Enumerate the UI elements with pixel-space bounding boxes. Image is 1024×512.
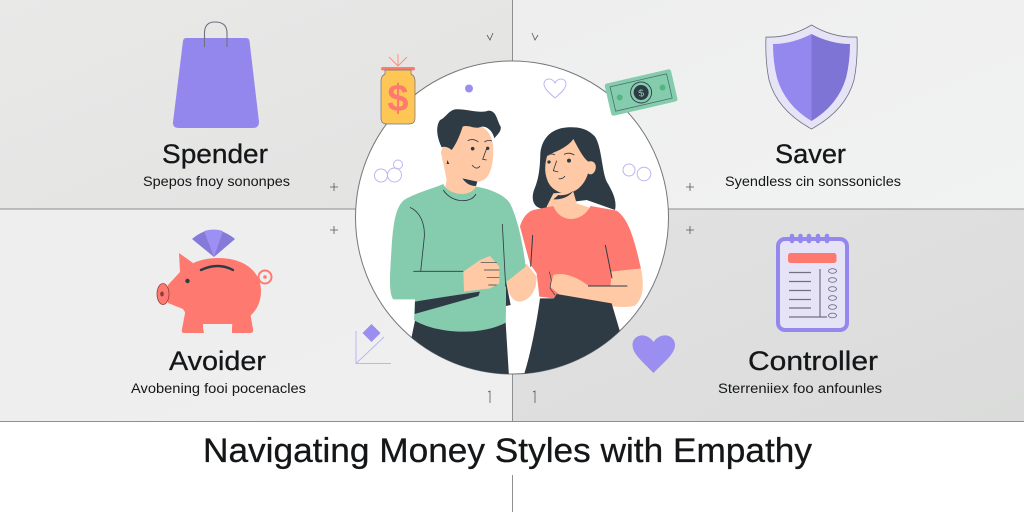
icon: shield [766,25,857,129]
icon: dollar jar: $ [387,78,409,120]
icon: banknote [604,69,678,116]
man [390,109,537,377]
icon: dollar jar [381,54,415,124]
decoration: dot [465,84,473,92]
woman [520,127,643,377]
panel: avoider background [0,209,512,421]
heading: avoider: Avoider [169,346,266,376]
heading: saver: Saver [775,139,846,169]
decoration: outline heart [544,79,566,98]
heading: spender: Spender [162,139,268,169]
panel: spender background [0,0,512,209]
central circle [356,61,668,374]
decoration: left bubbles [374,160,402,182]
panel: controller background [512,209,1024,421]
text: avoider description: Avobening fooi pocenacles [131,381,306,396]
text: spender description: Spepos fnoy sononpes [143,174,290,189]
heading: controller: Controller [748,346,878,376]
icon: shopping bag [173,22,259,128]
icon: filled heart [632,335,675,373]
text: saver description: Syendless cin sonssonicles [725,174,901,189]
icon: diamond growth chart [356,324,391,364]
title: Navigating Money Styles with Empathy [203,432,812,470]
decoration: right bubbles [623,164,651,181]
text: controller description: Sterreniiex foo anfounles [718,381,882,396]
illustration: couple [390,109,643,377]
panel: saver background [512,0,1024,209]
icon: checklist notepad [778,236,847,330]
icon: banknote: $ [638,88,646,100]
icon: piggy bank [157,230,272,333]
